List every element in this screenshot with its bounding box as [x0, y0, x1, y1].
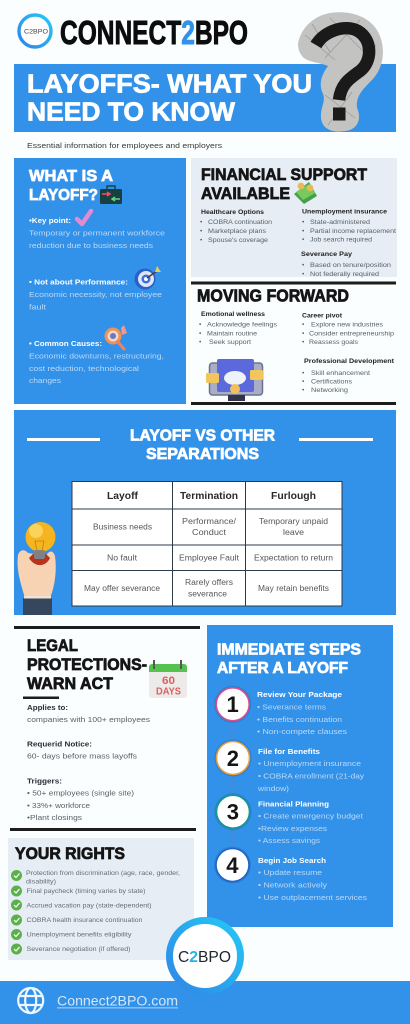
triggers: • 33%+ workforce [27, 801, 90, 810]
panel: your rights [8, 838, 194, 960]
step 4: Begin Job Search [258, 856, 327, 865]
unemployment insurance: • [302, 219, 305, 226]
step 3: 3 [227, 800, 239, 824]
title banner: NEED TO KNOW [27, 98, 236, 126]
comparison table [72, 482, 342, 606]
career pivot [302, 313, 394, 346]
step 2: File for Benefits [258, 747, 320, 756]
healthcare options [200, 209, 272, 244]
career pivot: Explore new industries [311, 322, 384, 329]
required notice [27, 740, 137, 761]
professional development [302, 358, 395, 394]
emotional wellness [199, 311, 278, 346]
triggers: • 50+ employees (single site) [27, 788, 134, 798]
professional development: Skill enhancement [311, 370, 370, 377]
severance pay: Not federally required [310, 271, 379, 278]
common causes: cost reduction, technological [29, 364, 139, 373]
professional development: Professional Development [304, 358, 395, 365]
heading: IMMEDIATE STEPS [217, 642, 361, 659]
heading [217, 642, 361, 677]
unemployment insurance [302, 208, 396, 244]
comparison table: Expectation to return [254, 554, 333, 563]
heading [29, 168, 113, 204]
step 1: • Severance terms [257, 702, 326, 712]
not about performance: Economic necessity, not employee [29, 290, 162, 299]
step 2: • Unemployment insurance [258, 759, 361, 768]
comparison table: severance [188, 590, 227, 598]
icon: globe [18, 988, 43, 1013]
step 2 [214, 740, 364, 793]
step 1 [214, 686, 347, 736]
panel: what is a layoff [14, 158, 186, 404]
icon: target [134, 266, 161, 290]
unemployment insurance: State-administered [310, 219, 370, 226]
rights list [26, 871, 180, 953]
severance pay: Based on tenure/position [310, 262, 391, 269]
severance pay: • [302, 262, 305, 269]
icon: hand holding light bulb [18, 522, 56, 615]
icon: briefcase [100, 186, 122, 204]
brand name: CONNECT2BPO [60, 14, 248, 51]
comparison table: Business needs [93, 523, 152, 532]
applies to [27, 703, 150, 724]
heading: WARN ACT [27, 675, 113, 693]
step 3: • Assess savings [258, 836, 320, 845]
icon: magnifier [106, 325, 127, 349]
career pivot: • [302, 339, 305, 346]
footer [0, 981, 410, 1024]
unemployment insurance: Unemployment insurance [302, 208, 387, 216]
triggers: Triggers: [27, 776, 62, 786]
step 2: 2 [227, 746, 239, 771]
website link: Connect2BPO.com [57, 994, 178, 1009]
not about performance: fault [29, 303, 46, 312]
header logo [19, 14, 248, 51]
rights list: Final paycheck (timing varies by state) [26, 889, 146, 895]
required notice: 60- days before mass layoffs [27, 752, 137, 761]
icon: question mark [298, 12, 383, 132]
comparison table: May offer severance [84, 584, 160, 593]
comparison table: Temporary unpaid [259, 517, 328, 526]
career pivot: • [302, 322, 305, 329]
step 4: • Update resume [258, 868, 322, 877]
healthcare options: Healthcare Options [201, 209, 264, 216]
unemployment insurance: • [302, 236, 305, 244]
professional development: • [302, 379, 305, 386]
step 1: 1 [226, 692, 239, 717]
title banner [14, 64, 396, 132]
step 4: • Network actively [258, 881, 327, 890]
heading: LEGAL [27, 637, 78, 655]
check icons [11, 870, 22, 954]
severance pay: • [302, 271, 305, 278]
subtitle: Essential information for employees and employers [27, 141, 222, 150]
logo badge: C2BPO [24, 28, 48, 36]
triggers [27, 776, 134, 822]
heading [27, 637, 147, 693]
step 1: • Benefits continuation [257, 715, 342, 724]
severance pay: Severance Pay [301, 251, 352, 258]
step 3: • Create emergency budget [258, 812, 363, 821]
career pivot: Consider entrepreneurship [309, 330, 394, 337]
emotional wellness: • [199, 330, 202, 337]
unemployment insurance: Partial income replacement [310, 228, 396, 235]
comparison table: Layoff [107, 491, 139, 502]
comparison table: leave [283, 528, 304, 537]
heading: AFTER A LAYOFF [217, 660, 348, 677]
comparison table: Rarely offers [185, 578, 233, 587]
heading: LAYOFF VS OTHER [130, 428, 275, 445]
heading: MOVING FORWARD [197, 286, 349, 306]
required notice: Requerid Notice: [27, 740, 92, 749]
not about performance [29, 278, 162, 312]
step 1: • Non-compete clauses [257, 727, 347, 736]
unemployment insurance: • [302, 228, 305, 235]
career pivot: Reassess goals [309, 339, 359, 346]
healthcare options: • [200, 219, 203, 226]
not about performance: • Not about Performance: [29, 278, 128, 287]
heading: LAYOFF? [29, 187, 98, 204]
rights list: Protection from discrimination (age, race, gender, [26, 871, 180, 877]
comparison table: Employee Fault [179, 554, 240, 563]
heading [201, 165, 368, 203]
heading: YOUR RIGHTS [15, 845, 125, 863]
common causes [29, 339, 164, 385]
heading: AVAILABLE [201, 184, 290, 203]
emotional wellness: • [199, 322, 202, 329]
icon: cloud screen [206, 359, 263, 401]
key point [29, 216, 165, 250]
icon: check mark [77, 211, 91, 224]
step 4: 4 [226, 853, 239, 878]
professional development: • [302, 370, 305, 377]
common causes: changes [29, 376, 61, 385]
rights list: disability) [26, 880, 56, 886]
panel: layoff vs other separations [14, 410, 396, 615]
panel: moving forward [197, 286, 395, 401]
comparison table: Performance/ [182, 517, 237, 526]
step 3: •Review expenses [258, 824, 327, 833]
comparison table: Furlough [271, 491, 316, 502]
severance pay [301, 251, 391, 278]
career pivot: Career pivot [302, 313, 343, 320]
step 2: • COBRA enrollment (21-day [258, 772, 364, 781]
logo badge [19, 15, 51, 47]
heading: FINANCIAL SUPPORT [201, 165, 368, 184]
emotional wellness: Emotional wellness [201, 311, 265, 318]
icon: 60 days calendar [149, 660, 187, 698]
icon: money [294, 182, 317, 204]
step 3 [214, 793, 363, 845]
heading: SEPARATIONS [146, 446, 259, 463]
step 1: Review Your Package [257, 690, 342, 699]
key point: Temporary or permanent workforce [29, 229, 165, 238]
title banner: LAYOFFS- WHAT YOU [27, 70, 312, 98]
rights list: COBRA health insurance continuation [26, 918, 142, 924]
panel: immediate steps [207, 625, 393, 927]
bottom logo badge [170, 920, 240, 992]
healthcare options: • [200, 228, 203, 235]
heading: WHAT IS A [29, 168, 113, 185]
emotional wellness: Maintain routine [207, 330, 257, 337]
rights list: Accrued vacation pay (state-dependent) [26, 904, 152, 910]
professional development: • [302, 387, 305, 394]
icon: 60 days calendar: 60 [162, 675, 175, 687]
step 2: window) [257, 784, 289, 793]
heading: PROTECTIONS- [27, 656, 147, 674]
panel: legal protections [14, 626, 200, 822]
professional development: Certifications [311, 379, 353, 386]
emotional wellness: • [199, 339, 202, 346]
unemployment insurance: Job search required [310, 236, 372, 244]
career pivot: • [302, 330, 305, 337]
heading [27, 428, 373, 463]
professional development: Networking [311, 387, 348, 394]
icon: 60 days calendar: DAYS [156, 686, 181, 698]
applies to: Applies to: [27, 703, 68, 712]
step 3: Financial Planning [258, 800, 330, 808]
triggers: •Plant closings [27, 813, 82, 822]
comparison table: Termination [180, 491, 238, 502]
emotional wellness: Seek support [209, 339, 251, 346]
comparison table: No fault [107, 554, 138, 563]
emotional wellness: Acknowledge feelings [207, 322, 278, 329]
key point: •Key point: [29, 216, 71, 225]
step 4: • Use outplacement services [258, 893, 367, 902]
panel: financial support [191, 158, 397, 278]
rights list: Severance negotiation (if offered) [26, 947, 130, 953]
common causes: • Common Causes: [29, 339, 102, 348]
common causes: Economic downturns, restructuring, [29, 351, 164, 360]
bottom logo badge: C2BPO [178, 949, 231, 966]
healthcare options: Marketplace plans [208, 228, 267, 235]
comparison table: Conduct [192, 528, 227, 537]
key point: reduction due to business needs [29, 241, 153, 250]
rights list: Unemployment benefits eligibility [26, 932, 132, 938]
comparison table: May retain benefits [258, 584, 329, 593]
healthcare options: Spouse's coverage [208, 237, 268, 244]
healthcare options: COBRA continuation [208, 219, 272, 226]
applies to: companies with 100+ employees [27, 715, 150, 724]
healthcare options: • [200, 237, 203, 244]
step 4 [214, 846, 367, 902]
